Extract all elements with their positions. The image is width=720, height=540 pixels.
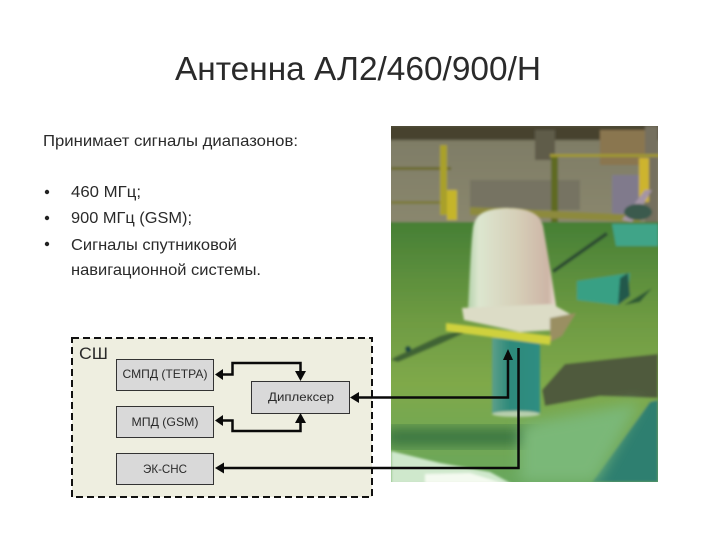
box: ЭК-СНС [116, 454, 214, 484]
shadow [542, 354, 658, 406]
flange [462, 304, 570, 332]
cable on floor [552, 232, 608, 273]
bullet list: signal ranges: навигационной системы. [71, 262, 261, 279]
teal corner [592, 400, 658, 482]
box: СМПД (ТЕТРА): СМПД (ТЕТРА) [122, 367, 208, 381]
bullet list: signal ranges [45, 184, 261, 279]
floor light band [520, 402, 640, 482]
box: Диплексер: Диплексер [268, 390, 334, 404]
title: Антенна АЛ2/460/900/Н [175, 50, 541, 87]
panel: СШ base station [72, 338, 372, 497]
box: СМПД (ТЕТРА) [116, 360, 214, 390]
wall background [391, 126, 658, 224]
floor [385, 222, 665, 492]
box: МПД (GSM) [116, 406, 214, 438]
floor shadow band [385, 428, 535, 446]
box: МПД (GSM): МПД (GSM) [132, 415, 198, 429]
label: СШ: СШ [79, 344, 108, 363]
bullet list: signal ranges: 460 МГц; [71, 184, 141, 201]
white glare [391, 451, 512, 484]
arrow: antenna to ЭК-СНС [215, 348, 518, 474]
bullet list: signal ranges: Сигналы спутниковой [71, 237, 237, 254]
box: ЭК-СНС: ЭК-СНС [143, 462, 187, 476]
bullet list: signal ranges: 900 МГц (GSM); [71, 210, 192, 227]
cable left [391, 330, 464, 362]
arrow: Диплексер to МПД [215, 413, 306, 431]
yellow bar [446, 323, 551, 345]
green box [577, 273, 630, 305]
box: Диплексер [252, 382, 350, 414]
photo: antenna in industrial hall [391, 126, 658, 482]
dome [468, 208, 557, 312]
arrow: Диплексер to СМПД [215, 363, 306, 381]
arrow: antenna to Диплексер [350, 349, 513, 403]
yellow beams [391, 167, 451, 170]
post [492, 338, 540, 414]
text block: intro: Принимает сигналы диапазонов: [43, 133, 298, 150]
